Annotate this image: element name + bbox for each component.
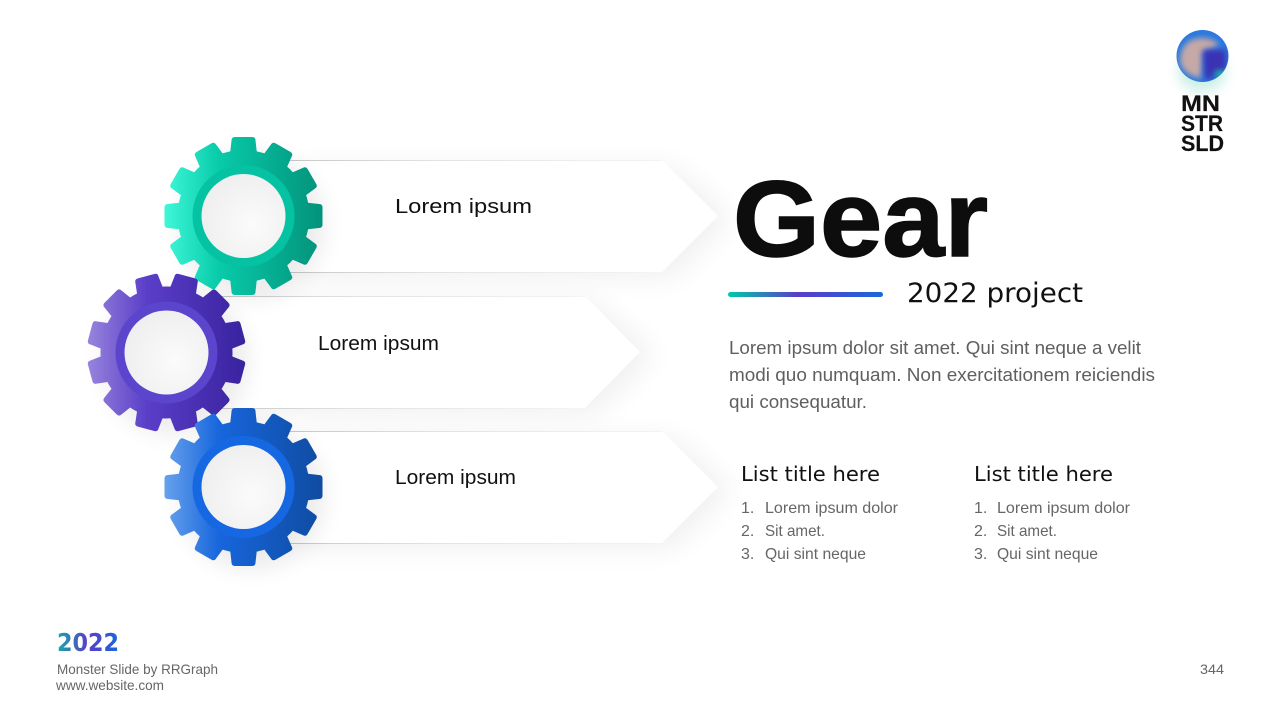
logo text: SLD [1181, 131, 1224, 156]
list items: left: Sit amet. [765, 523, 825, 540]
list items: left: 3. [741, 546, 754, 563]
icon: purple gear [83, 268, 251, 436]
logo text [1181, 91, 1224, 156]
logo text: STR [1181, 111, 1223, 136]
list items: left [741, 500, 899, 563]
text block: description: qui consequatur. [729, 391, 867, 412]
footer year: 2022 [57, 628, 119, 657]
list: right column [974, 462, 1131, 563]
panel: arrow 2 [205, 296, 655, 414]
gradient rule [728, 292, 883, 297]
list title: left: List title here [741, 462, 880, 486]
list items: right: Lorem ipsum dolor [997, 500, 1131, 517]
panel: arrow 1 [280, 160, 732, 278]
list items: right: 3. [974, 546, 987, 563]
icon: blue gear [160, 403, 328, 571]
list items: left: 1. [741, 500, 754, 517]
list items: left: 2. [741, 523, 754, 540]
label: arrow 1: Lorem ipsum [395, 196, 532, 218]
panel: arrow 3 [280, 431, 732, 549]
subtitle: 2022 project [907, 278, 1083, 309]
list items: right: 2. [974, 523, 987, 540]
title: Gear [733, 158, 988, 279]
logo text: MN [1181, 91, 1220, 116]
text block: description: modi quo numquam. Non exercitationem reiciendis [729, 364, 1155, 385]
footer credit: Monster Slide by RRGraph [57, 661, 218, 677]
list items: right: Qui sint neque [997, 546, 1098, 563]
label: arrow 2: Lorem ipsum [318, 333, 439, 355]
list items: left: Qui sint neque [765, 546, 866, 563]
list: left column [741, 462, 899, 563]
label: arrow 3: Lorem ipsum [395, 467, 516, 489]
list title: right: List title here [974, 462, 1113, 486]
logo [1176, 30, 1228, 156]
list items: right: Sit amet. [997, 523, 1057, 540]
list items: left: Lorem ipsum dolor [765, 500, 899, 517]
text block: description: Lorem ipsum dolor sit amet. Qui sint neque a velit [729, 337, 1141, 358]
icon: logo sphere [1176, 30, 1228, 92]
footer website: www.website.com [55, 677, 164, 693]
page number: 344 [1200, 661, 1224, 677]
icon: teal gear [160, 132, 328, 300]
text block: description [729, 337, 1155, 412]
list items: right [974, 500, 1131, 563]
list items: right: 1. [974, 500, 987, 517]
